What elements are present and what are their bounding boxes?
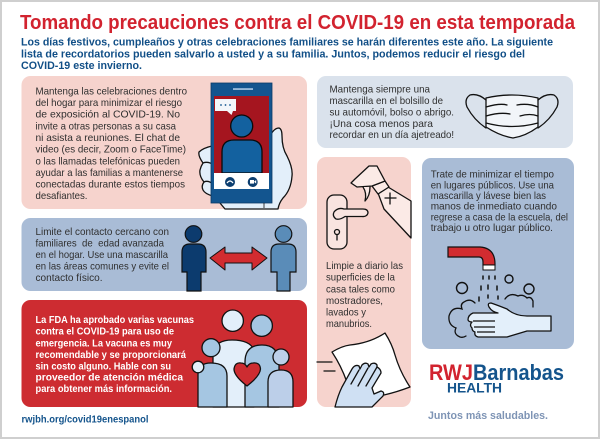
text: celebrations: ni asista a reuniones. El chat de (36, 133, 180, 144)
text: vaccine: recomendable y se proporcionará (36, 350, 186, 361)
text: limit contact: contacto físico. (36, 273, 102, 284)
text: celebrations (36, 86, 187, 202)
intro text (21, 36, 553, 72)
text: vaccine: La FDA ha aprobado varias vacunas (36, 315, 194, 326)
icon: faucet and washing hands (448, 247, 551, 337)
text: public places: trabajo u otro lugar público. (431, 223, 553, 234)
logo: RWJBarnabas Health: HEALTH (447, 380, 502, 396)
text: mask (330, 85, 454, 141)
text: public places: Trate de minimizar el tiempo (431, 170, 554, 181)
icon: door handle (327, 195, 368, 249)
panel: clean surfaces (317, 157, 411, 407)
icon: gloved hand wiping with cloth (317, 333, 410, 407)
intro text: Los días festivos, cumpleaños y otras celebraciones familiares se harán diferentes este año. La siguiente (21, 36, 553, 48)
text: mask: ¡Una cosa menos para (330, 119, 433, 130)
logo: RWJBarnabas Health: RWJ (429, 360, 473, 385)
text: clean surfaces: manubrios. (326, 319, 372, 330)
panel: celebrations at home (22, 76, 307, 209)
logo: RWJBarnabas Health (429, 360, 564, 396)
text: vaccine: para obtener más información. (36, 384, 172, 395)
text: limit contact: en las áreas comunes y evite el (36, 262, 169, 272)
tagline: Juntos más saludables. (428, 410, 548, 422)
icon: hand holding phone (199, 83, 292, 209)
panel: limit close contact (22, 218, 307, 291)
text: celebrations: desafiantes. (36, 191, 88, 202)
text: limit contact (36, 227, 169, 284)
icon: family with heart (192, 310, 293, 407)
icon: spray bottle (351, 166, 411, 238)
text: vaccine (36, 315, 194, 395)
text: celebrations: ayudar a las familias a mantenerse (36, 168, 183, 179)
text: limit contact: familiares de edad avanzada (36, 239, 164, 250)
panel: minimize public time (422, 158, 574, 349)
text: vaccine: contra el COVID-19 para uso de (36, 326, 174, 338)
text: public places: mascarilla y lávese bien las (431, 191, 546, 202)
text: clean surfaces: superficies de la (326, 273, 395, 284)
text: celebrations: de exposición al COVID-19. No (36, 110, 180, 121)
text: vaccine: proveedor de atención médica (36, 373, 183, 384)
text: celebrations: conectadas durante estos tiempos (36, 180, 185, 191)
text: clean surfaces: mostradores, (326, 296, 383, 307)
text: celebrations: video (es decir, Zoom o FaceTime) (36, 145, 186, 156)
text: clean surfaces: Limpie a diario las (326, 261, 403, 272)
text: clean surfaces (326, 261, 403, 330)
text: clean surfaces: casa tales como (326, 284, 395, 295)
text: clean surfaces: lavados y (326, 307, 367, 318)
icon: person light (271, 226, 296, 291)
text: mask: mascarilla en el bolsillo de (330, 96, 443, 107)
text: celebrations: Mantenga las celebraciones dentro (36, 86, 187, 98)
icon: two-way arrow (210, 247, 267, 270)
title: Tomando precauciones contra el COVID-19 en esta temporada (20, 12, 576, 34)
panel: carry a mask (317, 76, 573, 148)
text: public places: regrese a casa de la escuela, del (431, 212, 568, 224)
text: mask: recordar en un día ajetreado! (330, 130, 454, 141)
text: mask: Mantenga siempre una (330, 85, 430, 96)
text: vaccine: emergencia. La vacuna es muy (36, 338, 172, 349)
text: limit contact: Limite el contacto cercano con (36, 227, 169, 238)
text: public places (431, 170, 568, 234)
intro text: COVID-19 este invierno. (21, 60, 142, 72)
text: mask: su automóvil, bolso o abrigo. (330, 108, 454, 118)
icon: person dark (182, 226, 206, 291)
text: vaccine: sin costo alguno. Hable con su (36, 361, 171, 372)
text: celebrations: invite a otras personas a su casa (36, 121, 176, 132)
icon: face mask (466, 95, 558, 138)
text: celebrations: del hogar para minimizar el riesgo (36, 98, 182, 109)
url: rwjbh.org/covid19enespanol (22, 414, 149, 426)
logo: RWJBarnabas Health: Barnabas (473, 360, 564, 385)
panel: vaccine (22, 300, 307, 407)
text: public places: en lugares públicos. Use una (431, 180, 554, 192)
text: celebrations: o las llamadas telefónicas pueden (36, 156, 180, 167)
intro text: lista de recordatorios pueden salvarlo a usted y a su familia. Juntos, podemos reducir el riesgo del (21, 48, 525, 60)
text: public places: manos de inmediato cuando (431, 202, 557, 213)
text: limit contact: en el hogar. Use una mascarilla (36, 250, 168, 261)
